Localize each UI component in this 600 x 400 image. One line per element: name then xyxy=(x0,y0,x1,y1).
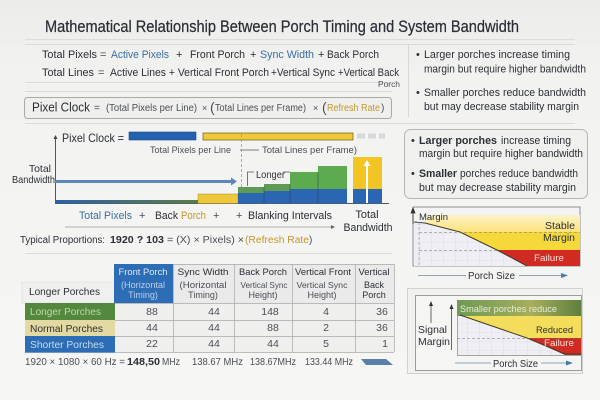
panel: takeaways boxed: increase timing xyxy=(501,135,571,147)
panel: takeaways top xyxy=(408,44,586,117)
labels: Smaller porches reduce xyxy=(460,304,557,315)
porch comparison table xyxy=(22,264,394,352)
column header: vertical back porch xyxy=(358,267,390,300)
x axis label with arrow xyxy=(455,358,573,370)
longer callout xyxy=(248,170,290,186)
axis labels: Total Pixels xyxy=(79,210,132,222)
formula: total pixels: + xyxy=(318,49,324,61)
pixel clock formula box: Pixel Clock xyxy=(32,100,91,114)
pixel clock formula box: ( xyxy=(322,99,327,115)
row: shorter porches: 44 xyxy=(208,338,220,350)
row: normal porches: 44 xyxy=(146,322,158,334)
per line / per frame labels: Total Lines per Frame) xyxy=(262,145,357,156)
y axis label: Bandwidth xyxy=(12,174,55,186)
axis labels: Total xyxy=(355,209,379,221)
pixel clock formula box: (Total Pixels per Line) xyxy=(106,103,197,114)
pixel clock results row: 1920 × 1080 × 60 Hz = xyxy=(25,357,125,368)
row: shorter porches: Shorter Porches xyxy=(30,339,104,351)
icon: flat slab xyxy=(361,359,393,365)
row: normal porches: 36 xyxy=(376,322,388,334)
pixel clock formula box: × xyxy=(313,103,318,113)
formula: total lines: +Vertical Sync xyxy=(271,67,335,79)
chart: signal margin vs porch size xyxy=(408,288,582,374)
panel: takeaways boxed: but may decrease stability margin xyxy=(419,182,576,194)
row: longer porches: 88 xyxy=(146,306,158,318)
y axis label with arrows: Margin xyxy=(418,336,450,348)
row: longer porches: 148 xyxy=(261,306,279,318)
curve and thresholds xyxy=(414,222,580,266)
area: below curve grid xyxy=(414,222,527,266)
y axis arrow xyxy=(411,208,415,224)
chart: signal margin vs porch size: Reduced xyxy=(536,325,573,336)
per line / per frame labels xyxy=(150,145,357,156)
axis labels: Back xyxy=(155,210,178,222)
y axis label with arrows: Signal xyxy=(418,324,447,336)
panel: takeaways top: Smaller porches reduce bandwidth xyxy=(424,87,586,99)
column header: vertical front: Height) xyxy=(307,290,337,300)
x axis label with arrow xyxy=(418,270,568,282)
row: shorter porches: 44 xyxy=(267,338,279,350)
area: green band xyxy=(457,300,581,316)
pixel clock legend bars xyxy=(62,131,385,145)
panel: takeaways top: Larger porches increase timing xyxy=(424,49,570,61)
row: longer porches xyxy=(25,303,388,320)
pixel clock formula box: × xyxy=(202,103,207,113)
typical proportions: 1920 ? 103 xyxy=(110,235,164,246)
longer callout: Longer xyxy=(256,170,286,181)
blue arrow xyxy=(55,178,237,186)
pixel clock results row: 133.44 MHz xyxy=(305,357,353,368)
area: grid xyxy=(457,316,581,355)
table backgrounds xyxy=(22,264,394,352)
formula: total pixels: + xyxy=(176,49,182,61)
row: longer porches: 36 xyxy=(376,306,388,318)
row: longer porches: Longer Porches xyxy=(30,306,101,318)
pixel clock formula box: ) xyxy=(381,103,384,114)
row: normal porches: 2 xyxy=(323,322,329,334)
formula: total pixels: Total Pixels xyxy=(42,49,97,61)
panel: takeaways boxed: • xyxy=(411,135,415,147)
axis labels: Porch xyxy=(181,210,206,222)
corner heading: Longer Porches xyxy=(29,286,100,298)
pixel clock results row xyxy=(25,357,393,368)
formula: total pixels: Back Porch xyxy=(327,49,379,61)
formula: total lines: Porch xyxy=(378,80,400,89)
area: red failure zone xyxy=(497,250,580,266)
chart axes xyxy=(56,138,389,204)
formula: total lines: Total Lines xyxy=(42,67,94,79)
row: normal porches: 88 xyxy=(267,322,279,334)
panel: takeaways boxed: porches reduce bandwidth xyxy=(460,168,578,180)
column header: back porch: Height) xyxy=(248,290,278,300)
area: yellow reduced zone xyxy=(460,315,581,338)
column header: sync width: (Horizontal xyxy=(180,280,226,290)
labels: Margin xyxy=(419,212,448,223)
column header: back porch: Back Porch xyxy=(239,267,287,278)
column header: vertical back porch: Porch xyxy=(362,290,386,300)
area: red failure xyxy=(527,338,581,355)
column header: vertical front xyxy=(295,267,351,300)
formula: total pixels: Front Porch xyxy=(190,49,245,61)
pixel clock formula box: ( xyxy=(210,99,215,115)
porch axis arrow xyxy=(65,225,335,229)
typical proportions: ) xyxy=(309,235,312,246)
column header: sync width: Timing) xyxy=(188,290,218,300)
chart: signal margin vs porch size: Failure xyxy=(544,338,574,349)
axis labels: Blanking Intervals xyxy=(248,210,332,222)
x axis label with arrow: Porch Size xyxy=(468,270,515,282)
total bandwidth column xyxy=(353,157,382,204)
pixel clock formula box: Total Lines per Frame) xyxy=(215,103,306,114)
typical proportions: = (X) × Pixels) × xyxy=(167,235,244,246)
chart: margin vs porch size xyxy=(411,207,580,282)
panel: takeaways boxed xyxy=(404,130,588,198)
column header: back porch: Vertical Sync xyxy=(240,280,288,290)
column header: vertical back porch: Vertical xyxy=(358,267,390,278)
y axis label: Total xyxy=(29,163,51,175)
table grid xyxy=(25,264,394,352)
pixel clock formula box: = xyxy=(94,103,100,114)
pixel clock results row: 138.67 MHz xyxy=(192,357,243,368)
formula: total lines: +Vertical Back xyxy=(338,67,399,79)
column header: vertical front: Vertical Sync xyxy=(296,280,348,290)
title: Mathematical Relationship Between Porch Timing and System Bandwidth xyxy=(45,17,519,36)
row: shorter porches: 22 xyxy=(146,338,158,350)
column header: front porch: Timing) xyxy=(128,290,158,300)
y axis label with arrows xyxy=(418,301,454,350)
axis labels: Bandwidth xyxy=(344,222,392,234)
typical proportions xyxy=(20,235,312,246)
panel: takeaways boxed: Smaller xyxy=(419,168,458,180)
axis labels: + xyxy=(139,210,145,222)
pixel clock formula box xyxy=(24,98,392,118)
curve and frame xyxy=(457,300,581,356)
formula: total pixels: Sync Width xyxy=(260,49,314,61)
column header: back porch xyxy=(239,267,288,300)
formula: total lines: = xyxy=(98,67,104,79)
row: shorter porches: 5 xyxy=(323,338,329,350)
row: shorter porches: 1 xyxy=(382,338,388,350)
row: normal porches xyxy=(25,320,388,336)
column header: sync width: Sync Width xyxy=(178,267,228,278)
panel: takeaways top: but may decrease stability margin xyxy=(424,101,579,113)
axis labels: + xyxy=(213,210,219,222)
column header: front porch xyxy=(114,264,173,303)
panel: takeaways boxed: Larger porches xyxy=(419,135,497,147)
stepped bars xyxy=(55,166,347,204)
pixel clock formula box: Refresh Rate xyxy=(327,103,380,114)
column header: vertical front: Vertical Front xyxy=(295,267,351,278)
row: normal porches: Normal Porches xyxy=(30,323,103,335)
formula: total lines xyxy=(42,67,400,89)
formula: total pixels: + xyxy=(250,49,256,61)
bandwidth chart xyxy=(12,131,392,234)
panel: takeaways top: • xyxy=(416,49,420,61)
typical proportions: Typical Proportions: xyxy=(20,235,105,246)
y axis label xyxy=(12,163,55,186)
formula: total lines: Active Lines + Vertical Front Porch xyxy=(110,67,269,79)
pixel clock legend bars: Pixel Clock = xyxy=(62,131,124,145)
formula: total pixels: = xyxy=(100,49,106,61)
column header: vertical back porch: Back xyxy=(364,280,385,290)
formula: total pixels xyxy=(42,49,379,61)
chart: margin vs porch size: Stable xyxy=(545,221,575,232)
axis labels: + xyxy=(236,210,242,222)
column header: sync width xyxy=(178,267,228,300)
x axis label with arrow: Porch Size xyxy=(493,358,538,370)
panel: takeaways top: margin but require higher bandwidth xyxy=(424,64,586,76)
row: longer porches: 4 xyxy=(323,306,329,318)
row: longer porches: 44 xyxy=(208,306,220,318)
formula: total pixels: Active Pixels xyxy=(111,49,169,61)
chart: margin vs porch size: Margin xyxy=(543,233,575,244)
column header: front porch: (Horizontal xyxy=(121,280,165,290)
typical proportions: (Refresh Rate xyxy=(245,235,309,246)
per line / per frame labels: Total Pixels per Line xyxy=(150,145,231,156)
row: shorter porches xyxy=(25,336,388,352)
pixel clock results row: 148,50 xyxy=(127,357,160,368)
pixel clock results row: 138.67MHz xyxy=(250,357,296,368)
pixel clock results row: MHz xyxy=(162,357,180,368)
row: normal porches: 44 xyxy=(208,322,220,334)
axis labels xyxy=(79,209,392,234)
chart: margin vs porch size: Failure xyxy=(534,253,564,264)
area: yellow stable zone xyxy=(425,215,580,250)
panel: takeaways boxed: margin but require higher bandwidth xyxy=(419,148,583,160)
panel: takeaways top: • xyxy=(416,87,420,99)
panel: takeaways boxed: • xyxy=(411,168,415,180)
column header: front porch: Front Porch xyxy=(118,267,168,278)
